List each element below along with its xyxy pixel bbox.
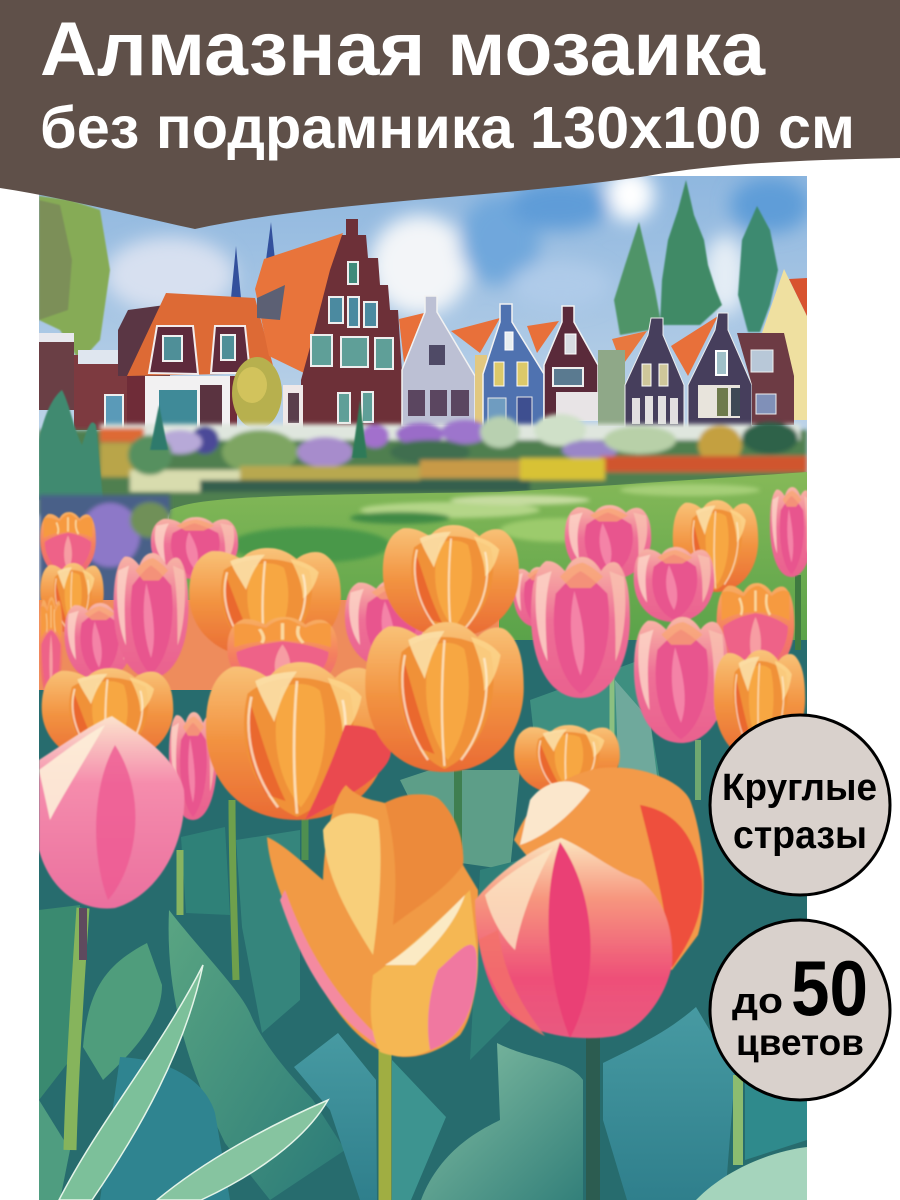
painting: Dutch village and tulip field (39, 169, 813, 1200)
tulips: far row (39, 487, 813, 760)
badge: up to 50 colours: до (732, 980, 783, 1021)
orange roofs between (399, 313, 424, 363)
dark houses (625, 318, 684, 428)
header banner (0, 0, 900, 229)
badge: up to 50 colours: цветов (736, 1022, 864, 1063)
lawn (168, 472, 807, 640)
title: без подрамника 130х100 см (40, 95, 855, 161)
church spires (231, 222, 275, 298)
left annex (39, 335, 74, 410)
flower garden (39, 414, 807, 515)
badge: up to 50 colours: 50 (791, 944, 868, 1032)
tulip: large pink-orange right (475, 767, 704, 1038)
houses (39, 219, 807, 436)
stems (70, 575, 798, 1200)
tulip: large orange centre (267, 785, 479, 1057)
blue house (483, 304, 544, 430)
foliage background (39, 600, 807, 1200)
tulips: middle row (42, 622, 620, 820)
right yellow and maroon houses (762, 269, 807, 420)
tulip: large pink left (39, 716, 184, 908)
badge: round rhinestones (710, 715, 890, 895)
left house (127, 293, 275, 376)
maroon house (544, 306, 598, 420)
title (40, 7, 855, 161)
poplar trees (39, 180, 778, 362)
grey house (402, 296, 475, 426)
badge: round rhinestones: стразы (733, 814, 867, 857)
badge: round rhinestones: Круглые (722, 767, 877, 809)
yellow tree (232, 357, 282, 429)
purple flowers left (39, 492, 172, 600)
stepped gable (301, 219, 404, 428)
sky with clouds (39, 169, 810, 476)
big stepped gable house roof (255, 233, 343, 373)
title: Алмазная мозаика (40, 7, 766, 92)
left evergreen shrub (39, 390, 367, 500)
badge: up to 50 colours (710, 920, 890, 1100)
